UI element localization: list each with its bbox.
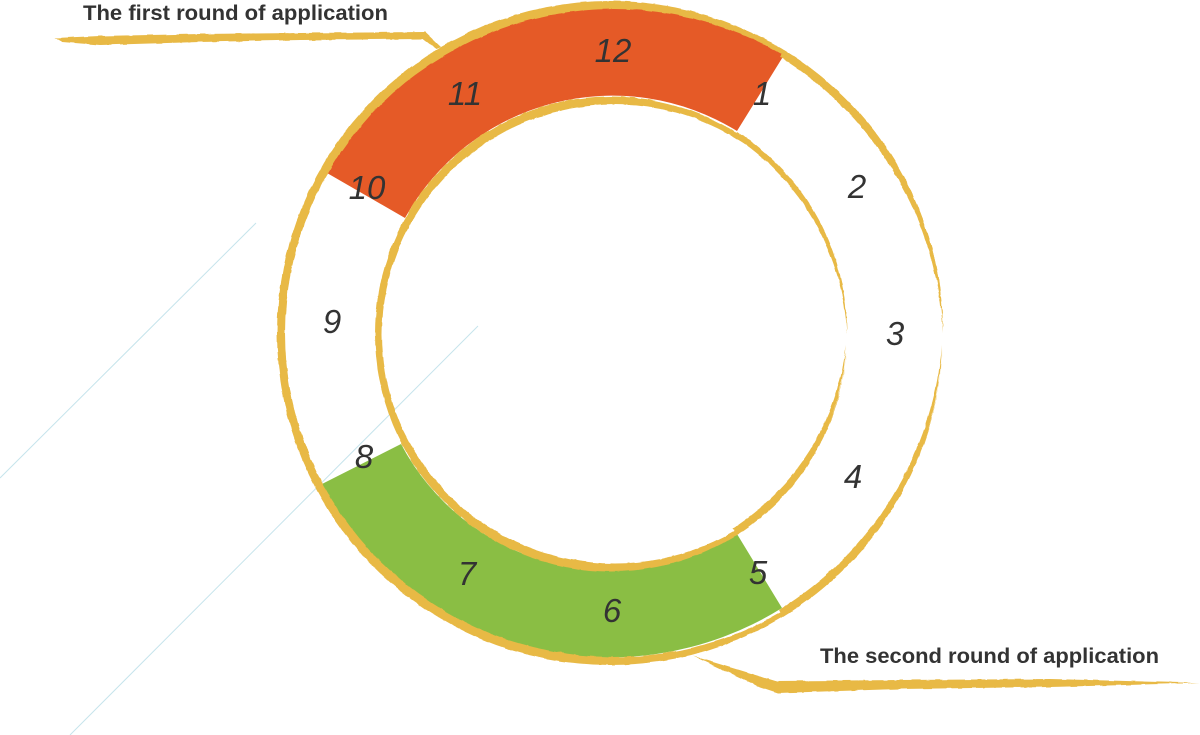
segment: second round months (green) [320, 444, 782, 657]
month numbers: 2 [847, 168, 866, 205]
month numbers: 9 [323, 303, 341, 340]
month numbers: 4 [844, 458, 862, 495]
month numbers: 11 [448, 75, 482, 112]
heading: first round label: The first round of application [83, 2, 388, 25]
month numbers: 12 [595, 32, 631, 69]
ring: inner brush stroke [375, 96, 847, 572]
month numbers: 3 [886, 315, 905, 352]
month numbers: 8 [355, 438, 374, 475]
month numbers: 1 [753, 75, 771, 112]
month numbers [323, 32, 905, 629]
month numbers: 10 [349, 169, 386, 206]
leader line: first round [55, 32, 441, 49]
segment: first round months (orange) [327, 7, 784, 218]
heading: second round label: The second round of application [820, 645, 1159, 668]
leader line: second round [693, 656, 1200, 693]
month numbers: 5 [749, 554, 768, 591]
month numbers: 6 [603, 592, 622, 629]
month numbers: 7 [458, 555, 478, 592]
ring: outer brush stroke [277, 1, 943, 665]
